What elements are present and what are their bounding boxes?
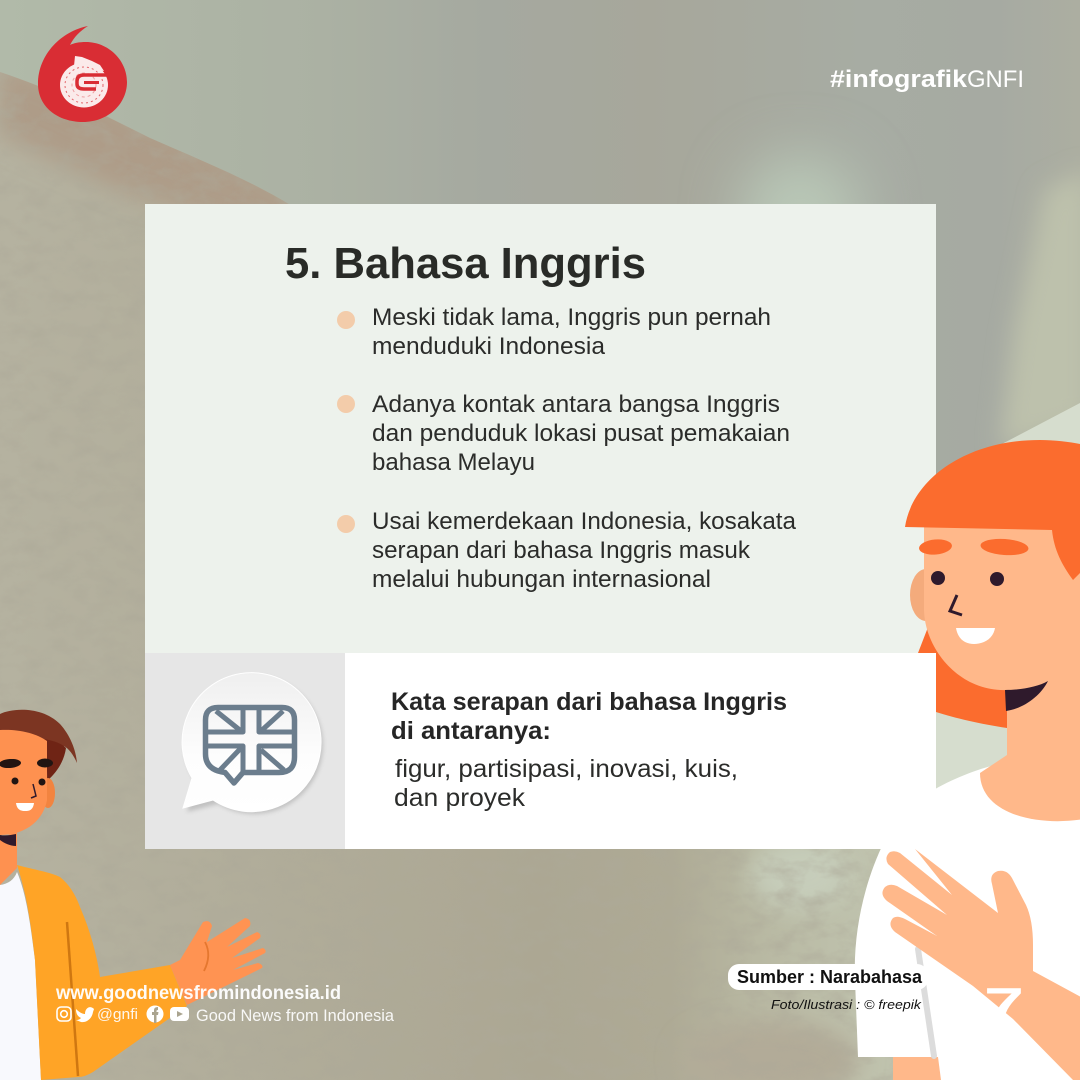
icon: twitter — [76, 1007, 94, 1022]
footer: website and social media: Good News from Indonesia — [196, 1006, 395, 1025]
illustration: man in orange jacket — [0, 710, 266, 1080]
subheading: di antaranya: — [391, 717, 551, 745]
illustration: woman with orange hair — [855, 440, 1080, 1080]
bullet list: Adanya kontak antara bangsa Inggris — [372, 391, 780, 418]
footer: website and social media: www.goodnewsfromindonesia.id — [55, 983, 341, 1004]
bullet list: dan penduduk lokasi pusat pemakaian — [372, 420, 790, 447]
bullet list: Meski tidak lama, Inggris pun pernah — [372, 304, 771, 331]
panel: main content card — [145, 204, 936, 653]
bullet list: bahasa Melayu — [372, 449, 535, 476]
bullet list — [337, 304, 797, 593]
hashtag: #infografikGNFI: GNFI — [967, 66, 1024, 93]
bullet list: menduduki Indonesia — [372, 333, 606, 360]
icon: instagram — [57, 1007, 71, 1021]
loanwords text — [394, 755, 738, 812]
subheading: Kata serapan dari bahasa Inggris — [391, 688, 787, 716]
icon: facebook — [146, 1006, 164, 1023]
panel: gray icon box — [145, 653, 345, 849]
source credit: Sumber : Narabahasa — [737, 967, 923, 987]
loanwords text: figur, partisipasi, inovasi, kuis, — [395, 755, 738, 783]
source credit: Foto/Ilustrasi : © freepik — [771, 997, 923, 1012]
logo: GNFI red emblem — [38, 26, 127, 122]
loanwords text: dan proyek — [394, 784, 526, 812]
icon: youtube — [170, 1007, 189, 1021]
subheading — [391, 688, 787, 745]
panel: white loanwords box — [345, 653, 936, 849]
footer: website and social media — [55, 983, 395, 1025]
source credit — [728, 964, 928, 1012]
bullet list: melalui hubungan internasional — [372, 566, 711, 593]
bullet list: serapan dari bahasa Inggris masuk — [372, 537, 751, 564]
footer: website and social media: @gnfi — [97, 1006, 138, 1023]
page number: 7 — [984, 978, 1024, 1030]
icon: speech bubble with British flag — [182, 673, 323, 814]
bullet list: Usai kemerdekaan Indonesia, kosakata — [372, 508, 797, 535]
heading: 5. Bahasa Inggris — [285, 239, 646, 288]
hashtag: #infografikGNFI — [830, 66, 1024, 93]
hashtag: #infografikGNFI: #infografik — [830, 66, 968, 93]
